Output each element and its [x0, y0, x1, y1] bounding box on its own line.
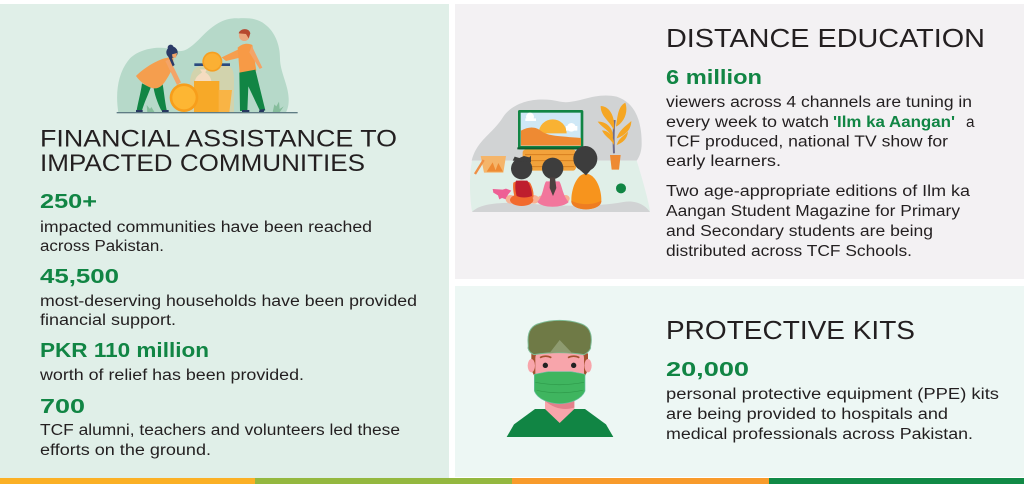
stat: 250+ communities — [40, 190, 372, 255]
heading: protective kits: PROTECTIVE KITS — [666, 315, 915, 345]
footer colour bar — [0, 478, 1024, 484]
stat: 700 volunteers: TCF alumni, teachers and volunteers led these — [40, 422, 400, 439]
stat: 20,000 PPE kits — [666, 358, 999, 443]
text block: student magazine — [666, 183, 971, 260]
stat: 20,000 PPE kits: personal protective equipment (PPE) kits — [666, 386, 999, 403]
text block: student magazine: Aangan Student Magazine for Primary — [666, 203, 960, 220]
stat: PKR 110 million relief: PKR 110 million — [40, 339, 209, 362]
text block: student magazine: Two age-appropriate editions of Ilm ka — [666, 183, 971, 200]
stat: 700 volunteers: efforts on the ground. — [40, 442, 211, 459]
illustration: people saving coins in a jar — [117, 18, 298, 113]
heading: distance education: DISTANCE EDUCATION — [666, 23, 985, 53]
panel: distance education — [455, 4, 1024, 279]
stat: 45,500 households: 45,500 — [40, 265, 119, 288]
stat: 6 million viewers: TCF produced, national TV show for — [666, 134, 948, 150]
stat: 700 volunteers — [40, 395, 400, 459]
text block: student magazine: and Secondary students are being — [666, 223, 933, 240]
text block: student magazine: distributed across TCF Schools. — [666, 243, 912, 260]
stat: 6 million viewers: a — [966, 114, 975, 131]
stat: 20,000 PPE kits: medical professionals across Pakistan. — [666, 426, 973, 443]
stat: 6 million viewers: early learners. — [666, 153, 781, 170]
stat: 250+ communities: across Pakistan. — [40, 238, 164, 255]
stat: 6 million viewers: every week to watch — [666, 114, 829, 131]
stat: 6 million viewers: viewers across 4 channels are tuning in — [666, 94, 972, 111]
heading: financial assistance: IMPACTED COMMUNITIES — [40, 150, 365, 177]
stat: PKR 110 million relief — [39, 339, 304, 384]
illustration: masked medical worker — [507, 320, 613, 437]
heading: financial assistance — [40, 126, 397, 177]
heading: financial assistance: FINANCIAL ASSISTANCE TO — [40, 126, 397, 152]
panel: protective kits — [455, 286, 1024, 477]
stat: 6 million viewers — [666, 66, 975, 170]
stat: 20,000 PPE kits: are being provided to hospitals and — [666, 406, 948, 423]
panel: financial assistance — [0, 4, 449, 478]
stat: 250+ communities: impacted communities have been reached — [40, 219, 372, 236]
stat: 45,500 households — [40, 265, 417, 329]
stat: 20,000 PPE kits: 20,000 — [666, 358, 749, 381]
stat: 6 million viewers: 6 million — [666, 66, 762, 89]
stat: 700 volunteers: 700 — [40, 395, 85, 418]
stat: 250+ communities: 250+ — [40, 190, 97, 213]
stat: 45,500 households: most-deserving households have been provided — [40, 293, 417, 310]
stat: 6 million viewers: 'Ilm ka Aangan' — [833, 114, 955, 131]
stat: 45,500 households: financial support. — [40, 312, 176, 329]
illustration: seated children — [493, 146, 601, 209]
stat: PKR 110 million relief: worth of relief has been provided. — [39, 367, 304, 384]
illustration: children watching television — [470, 96, 650, 212]
